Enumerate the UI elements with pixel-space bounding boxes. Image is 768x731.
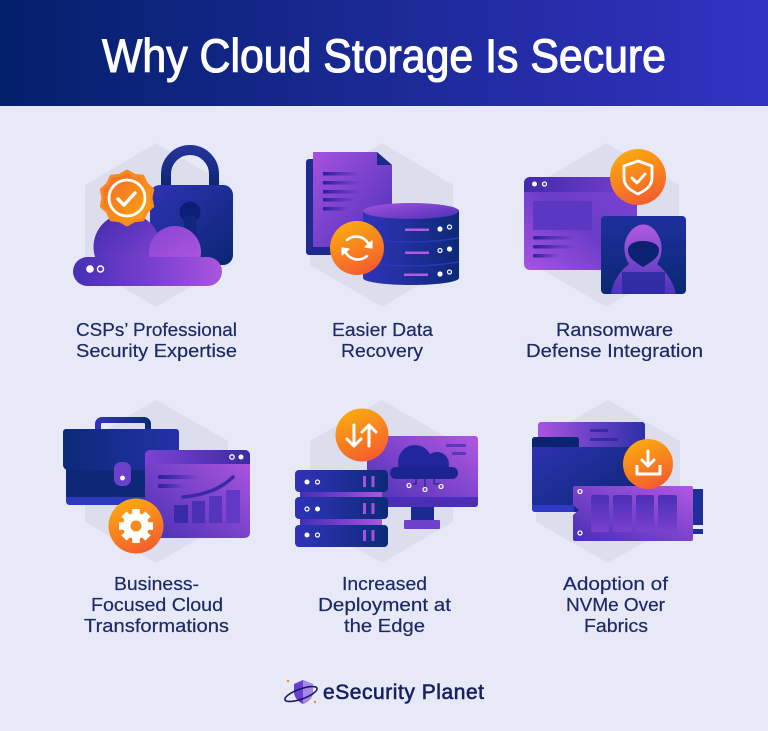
label: Increased bbox=[342, 574, 427, 594]
logo: eSecurity Planet bbox=[283, 680, 484, 705]
label bbox=[76, 320, 237, 361]
label: Transformations bbox=[84, 616, 229, 636]
panel: business-focused cloud transformations bbox=[63, 400, 250, 636]
label: Deployment at bbox=[318, 595, 451, 615]
icon: orange check badge bbox=[101, 171, 153, 225]
label: CSPs’ Professional bbox=[76, 320, 237, 340]
icon: browser window and hacker bbox=[524, 143, 686, 307]
label bbox=[318, 574, 451, 636]
title: Why Cloud Storage Is Secure bbox=[102, 29, 666, 82]
icon: orange download bbox=[623, 439, 673, 489]
panel: adoption of NVMe over fabrics bbox=[532, 400, 703, 636]
icon: document and database bbox=[306, 143, 459, 307]
label: NVMe Over bbox=[566, 595, 665, 615]
label bbox=[332, 320, 434, 361]
label: Defense Integration bbox=[526, 341, 703, 361]
icon: orange sync arrows bbox=[330, 221, 384, 275]
icon: orange up-down arrows bbox=[336, 408, 388, 462]
panel: CSPs' professional security expertise bbox=[73, 143, 237, 361]
icon: orange gear bbox=[108, 498, 164, 554]
label bbox=[526, 320, 703, 361]
label bbox=[563, 574, 669, 636]
icon: shield with orbit bbox=[283, 680, 319, 705]
panel: ransomware defense integration bbox=[524, 143, 703, 361]
label: Easier Data bbox=[332, 320, 434, 340]
label: Business- bbox=[114, 574, 199, 594]
label: Ransomware bbox=[556, 320, 673, 340]
label: Focused Cloud bbox=[91, 595, 223, 615]
label: the Edge bbox=[344, 616, 425, 636]
label: Adoption of bbox=[563, 574, 669, 594]
label: Fabrics bbox=[584, 616, 648, 636]
panel: easier data recovery bbox=[306, 143, 459, 361]
icon: cloud on screen bbox=[390, 445, 458, 492]
icon: orange shield bbox=[610, 149, 666, 205]
icon: folder and NVMe drive bbox=[532, 400, 703, 563]
icon: servers and monitor bbox=[295, 400, 478, 563]
label: Security Expertise bbox=[76, 341, 237, 361]
label bbox=[84, 574, 229, 636]
icon: cloud lock with badge bbox=[73, 143, 233, 307]
icon: briefcase and chart window bbox=[63, 400, 250, 563]
panel: increased deployment at the edge bbox=[295, 400, 478, 636]
header banner bbox=[0, 0, 768, 106]
wordmark: eSecurity Planet bbox=[323, 681, 484, 704]
label: Recovery bbox=[341, 341, 423, 361]
